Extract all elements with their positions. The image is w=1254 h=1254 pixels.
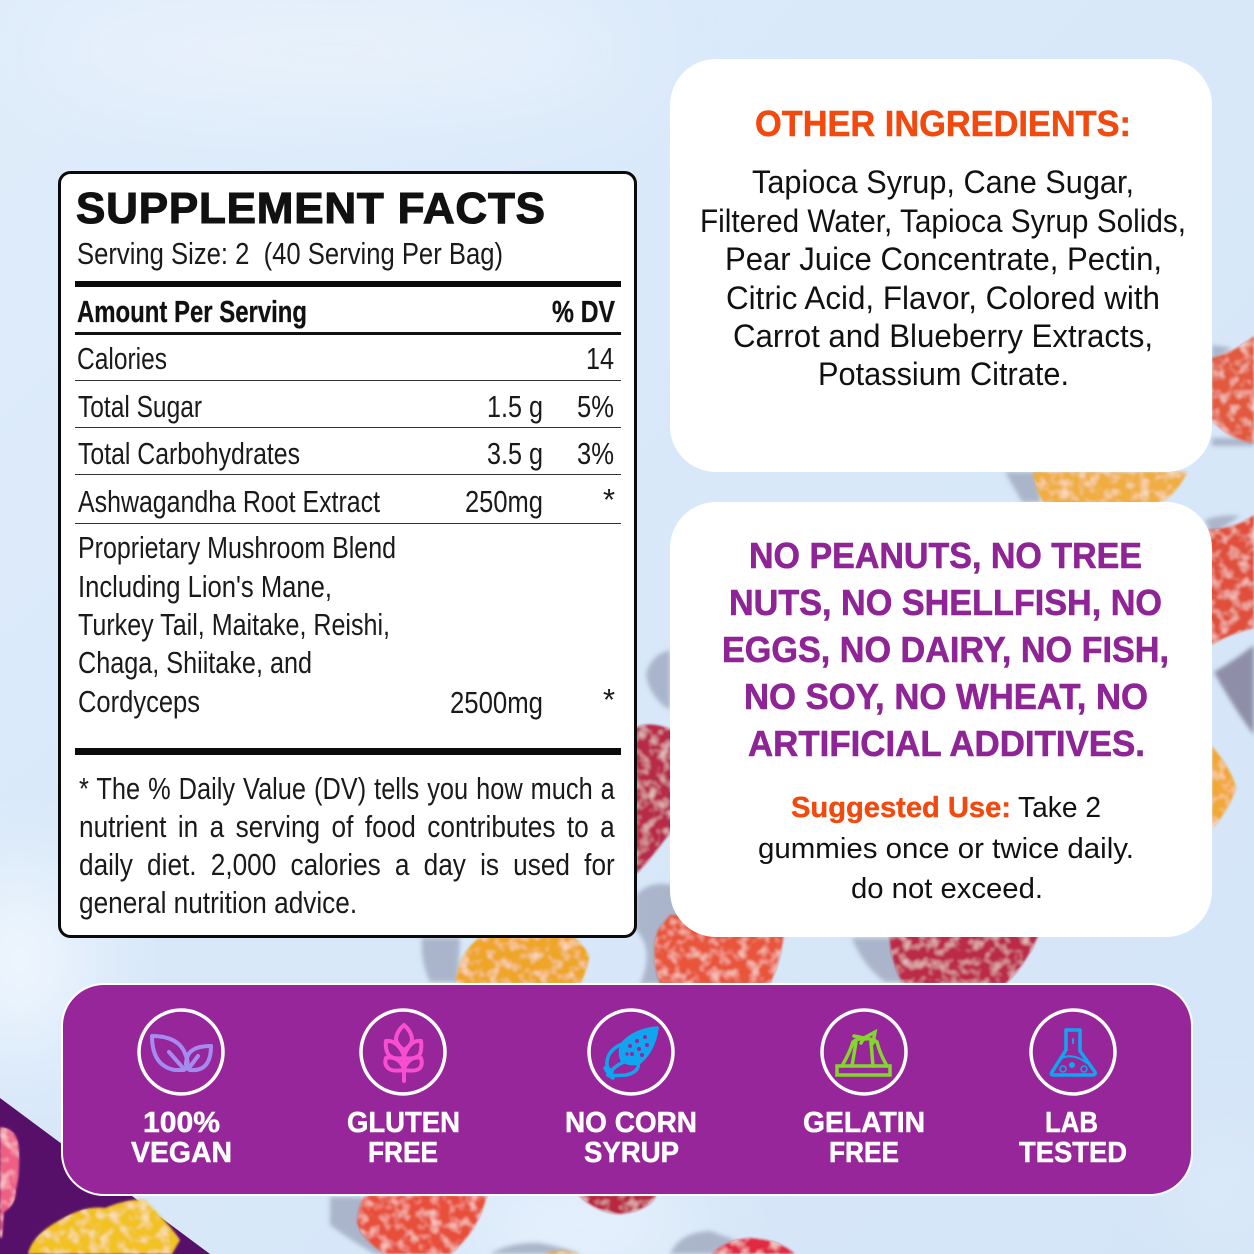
allergen statement: NUTS, NO SHELLFISH, NO [729, 582, 1162, 623]
label: FREE [829, 1137, 899, 1169]
row: proprietary mushroom blend: Including Lion's Mane, [78, 569, 332, 604]
icon: jelly [837, 1032, 890, 1075]
ingredients list: Tapioca Syrup, Cane Sugar, [752, 164, 1134, 200]
row: proprietary mushroom blend: Proprietary Mushroom Blend [78, 530, 396, 565]
row: total sugar [78, 389, 614, 424]
label: LAB [1045, 1107, 1098, 1139]
ingredients list: Filtered Water, Tapioca Syrup Solids, [700, 203, 1186, 239]
table header [77, 294, 615, 329]
row: total carbohydrates: 3.5 g [487, 436, 543, 471]
row: ashwagandha: Ashwagandha Root Extract [78, 484, 380, 519]
footnote: general nutrition advice. [79, 885, 357, 920]
row: total carbohydrates: 3% [577, 436, 614, 471]
row: ashwagandha [78, 482, 615, 519]
panel: allergens and suggested use [670, 502, 1212, 937]
label [803, 1107, 925, 1169]
ingredients list: Citric Acid, Flavor, Colored with [726, 280, 1160, 316]
ingredients list: Pear Juice Concentrate, Pectin, [725, 241, 1162, 277]
row: proprietary mushroom blend: Turkey Tail, Maitake, Reishi, [78, 607, 390, 642]
row: total sugar: 1.5 g [487, 389, 543, 424]
footnote: daily diet. 2,000 calories a day is used for [79, 847, 615, 882]
label [131, 1107, 232, 1169]
badge: 100% vegan [131, 1010, 232, 1169]
heading: other ingredients: OTHER INGREDIENTS: [755, 103, 1131, 144]
row: total carbohydrates: Total Carbohydrates [78, 436, 300, 471]
label: FREE [368, 1137, 438, 1169]
icon: leaves [152, 1036, 211, 1070]
ingredients list [700, 164, 1186, 392]
row: calories: 14 [586, 341, 614, 376]
suggested use: gummies once or twice daily. [758, 833, 1134, 865]
label: TESTED [1019, 1137, 1127, 1169]
panel: supplement facts [60, 172, 636, 936]
table header: % DV [552, 294, 615, 329]
icon: corn [605, 1028, 657, 1078]
suggested use: do not exceed. [851, 873, 1043, 905]
row: total sugar: Total Sugar [78, 389, 202, 424]
ingredients list: Potassium Citrate. [818, 356, 1069, 392]
label: 100% [143, 1107, 220, 1139]
allergen statement: ARTIFICIAL ADDITIVES. [748, 723, 1145, 764]
table header: Amount Per Serving [77, 294, 307, 329]
row: ashwagandha: * [603, 482, 615, 517]
footnote: * The % Daily Value (DV) tells you how much a [79, 771, 615, 806]
row: proprietary mushroom blend: 2500mg [450, 685, 543, 720]
panel: badges band [62, 984, 1192, 1195]
serving size: Serving Size: 2 (40 Serving Per Bag) [77, 236, 503, 271]
row: total carbohydrates [78, 436, 614, 471]
label [565, 1107, 697, 1169]
label: NO CORN [565, 1107, 697, 1139]
icon: wheat [385, 1025, 422, 1081]
row: calories: Calories [77, 341, 167, 376]
panel: other ingredients [670, 59, 1212, 472]
badge: gluten free [347, 1010, 460, 1169]
label [1019, 1107, 1127, 1169]
row: calories [77, 341, 614, 376]
badge: no corn syrup [565, 1010, 697, 1169]
allergen statement: EGGS, NO DAIRY, NO FISH, [722, 629, 1169, 670]
suggested use: Take 2 [1018, 792, 1101, 824]
heading: supplement facts: SUPPLEMENT FACTS [76, 184, 545, 233]
allergen statement: NO SOY, NO WHEAT, NO [744, 676, 1148, 717]
label: GLUTEN [347, 1107, 460, 1139]
row: proprietary mushroom blend: Cordyceps [78, 684, 200, 719]
badge: gelatin free [803, 1010, 925, 1169]
label [347, 1107, 460, 1169]
row: ashwagandha: 250mg [465, 484, 543, 519]
row: proprietary mushroom blend: * [603, 682, 615, 717]
allergen statement: NO PEANUTS, NO TREE [749, 535, 1142, 576]
row: proprietary mushroom blend: Chaga, Shiitake, and [78, 645, 312, 680]
gummies background [0, 336, 1254, 1254]
purple bag corner [0, 1098, 210, 1254]
allergen statement [722, 535, 1169, 764]
label: SYRUP [584, 1137, 679, 1169]
footnote: nutrient in a serving of food contributes to a [79, 809, 615, 844]
label: VEGAN [131, 1137, 232, 1169]
footnote [79, 770, 619, 922]
label: GELATIN [803, 1107, 925, 1139]
ingredients list: Carrot and Blueberry Extracts, [733, 318, 1153, 354]
suggested use [758, 792, 1134, 905]
icon: flask [1051, 1030, 1095, 1075]
row: proprietary mushroom blend [78, 530, 615, 720]
row: total sugar: 5% [577, 389, 614, 424]
suggested use: Suggested Use: [791, 792, 1011, 824]
badge: lab tested [1019, 1010, 1127, 1169]
